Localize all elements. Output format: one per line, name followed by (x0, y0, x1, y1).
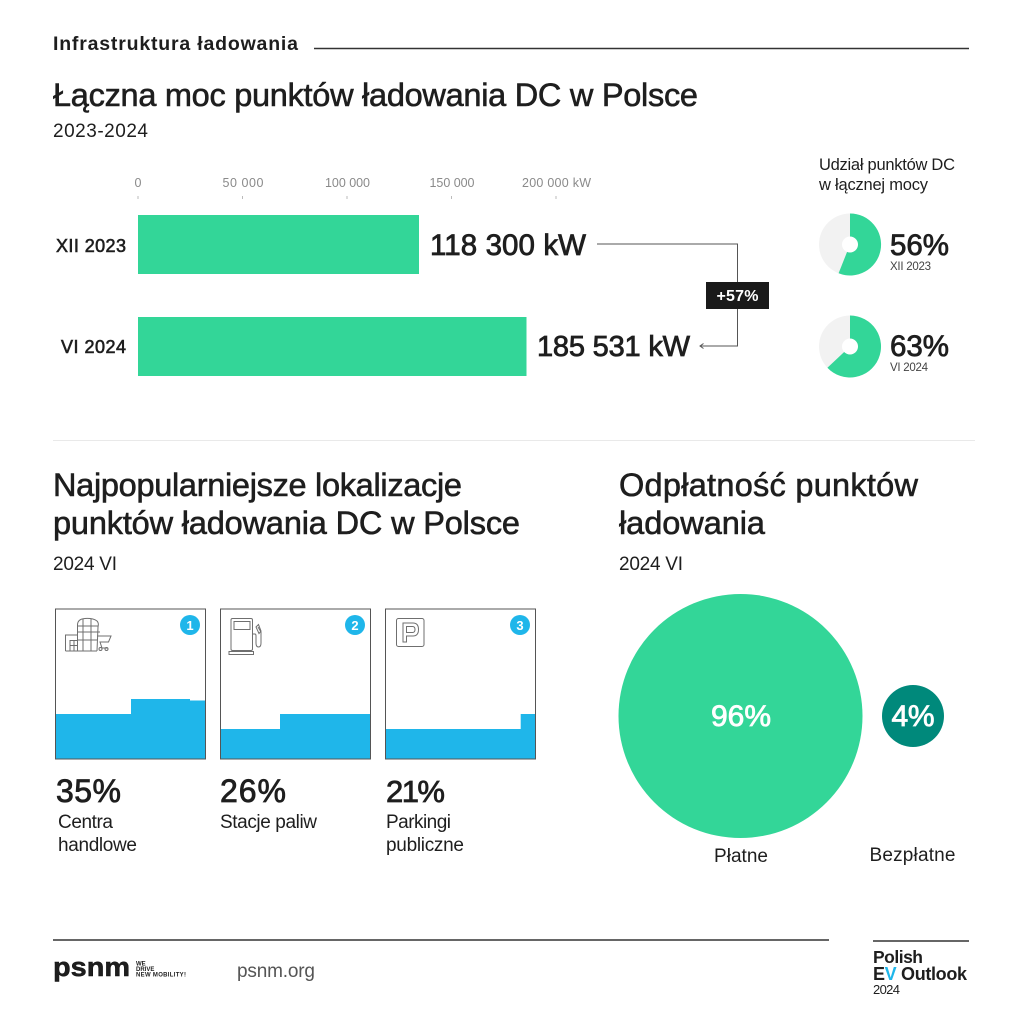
logo: PSNM (53, 952, 186, 982)
bubble: paid 96% (618, 594, 862, 838)
icon: shopping centre (66, 618, 111, 651)
number badge 1 (180, 615, 200, 635)
label: Parkingi (386, 812, 451, 833)
icon: fuel pump (229, 618, 261, 654)
axis ticks (135, 176, 591, 199)
logo: PSNM: WE (136, 962, 146, 968)
label: handlowe (58, 835, 137, 856)
arrow: growth connector (597, 244, 738, 348)
share heading: Udział punktów DC (819, 156, 955, 174)
bubble: free 4% (882, 685, 944, 747)
heading: locations: Najpopularniejsze lokalizacje (53, 467, 462, 503)
bar: VI 2024 (61, 317, 691, 376)
share heading: w łącznej mocy (818, 176, 929, 194)
bar chart: total DC power (56, 176, 691, 376)
panel: DC share (818, 156, 955, 378)
donut: XII 2023: 56% (890, 229, 949, 262)
logo: Polish EV Outlook 2024: EV Outlook (873, 964, 968, 984)
bubble: free 4%: 4% (892, 700, 934, 733)
panel: location 2 (220, 609, 371, 833)
bar: XII 2023 (56, 215, 586, 274)
axis ticks: 50 000 (222, 176, 264, 190)
bubble: paid 96%: 96% (711, 700, 771, 733)
subtitle: paid points: 2024 VI (619, 554, 683, 575)
donut: VI 2024: VI 2024 (890, 362, 929, 374)
logo: PSNM: DRIVE (136, 967, 154, 973)
axis ticks: 150 000 (430, 176, 475, 190)
number badge 3 (510, 615, 530, 635)
donut: XII 2023 (819, 213, 949, 276)
value 35%: 35% (56, 773, 121, 809)
logo: PSNM: psnm (53, 952, 130, 982)
label: paid: Płatne (714, 846, 768, 867)
label: Stacje paliw (220, 812, 317, 833)
number badge 1: 1 (186, 618, 194, 633)
bar: VI 2024: 185 531 kW (537, 331, 691, 363)
heading: locations: punktów ładowania DC w Polsce (53, 505, 520, 541)
axis ticks: 0 (135, 176, 142, 190)
number badge 3: 3 (516, 618, 524, 633)
logo: Polish EV Outlook 2024 (873, 941, 969, 997)
website: psnm.org (237, 961, 315, 982)
subtitle: locations: 2024 VI (53, 554, 117, 575)
bar: XII 2023: 118 300 kW (430, 229, 586, 262)
label: Centra (58, 812, 113, 833)
number badge 2: 2 (351, 618, 359, 633)
donut: XII 2023: XII 2023 (890, 261, 931, 273)
icon: parking (396, 618, 424, 646)
section header: Infrastruktura ładowania (53, 33, 298, 55)
heading: paid points: Odpłatność punktów (619, 467, 919, 503)
logo: PSNM: NEW MOBILITY! (136, 972, 186, 978)
bubble chart: paid vs free (618, 594, 956, 867)
axis ticks: 100 000 (325, 176, 370, 190)
value 26%: 26% (220, 773, 286, 809)
donut: VI 2024 (819, 316, 949, 378)
bar: XII 2023: XII 2023 (56, 236, 126, 256)
axis ticks: 200 000 kW (522, 176, 591, 190)
panel: location 3 (385, 609, 536, 856)
heading: paid points: ładowania (619, 505, 766, 541)
bar: VI 2024: VI 2024 (61, 337, 126, 357)
label: free: Bezpłatne (870, 845, 956, 866)
donut: VI 2024: 63% (890, 330, 949, 363)
title: Łączna moc punktów ładowania DC w Polsce (53, 77, 698, 113)
callout: +57% (706, 282, 769, 309)
callout: +57%: +57% (716, 288, 758, 305)
value 21%: 21% (386, 774, 445, 809)
subtitle: 2023-2024 (53, 121, 148, 142)
logo: Polish EV Outlook 2024: 2024 (873, 982, 900, 997)
number badge 2 (345, 615, 365, 635)
logo: Polish EV Outlook 2024: Polish (873, 947, 923, 967)
panel: location 1 (55, 609, 206, 856)
label: publiczne (386, 835, 464, 856)
